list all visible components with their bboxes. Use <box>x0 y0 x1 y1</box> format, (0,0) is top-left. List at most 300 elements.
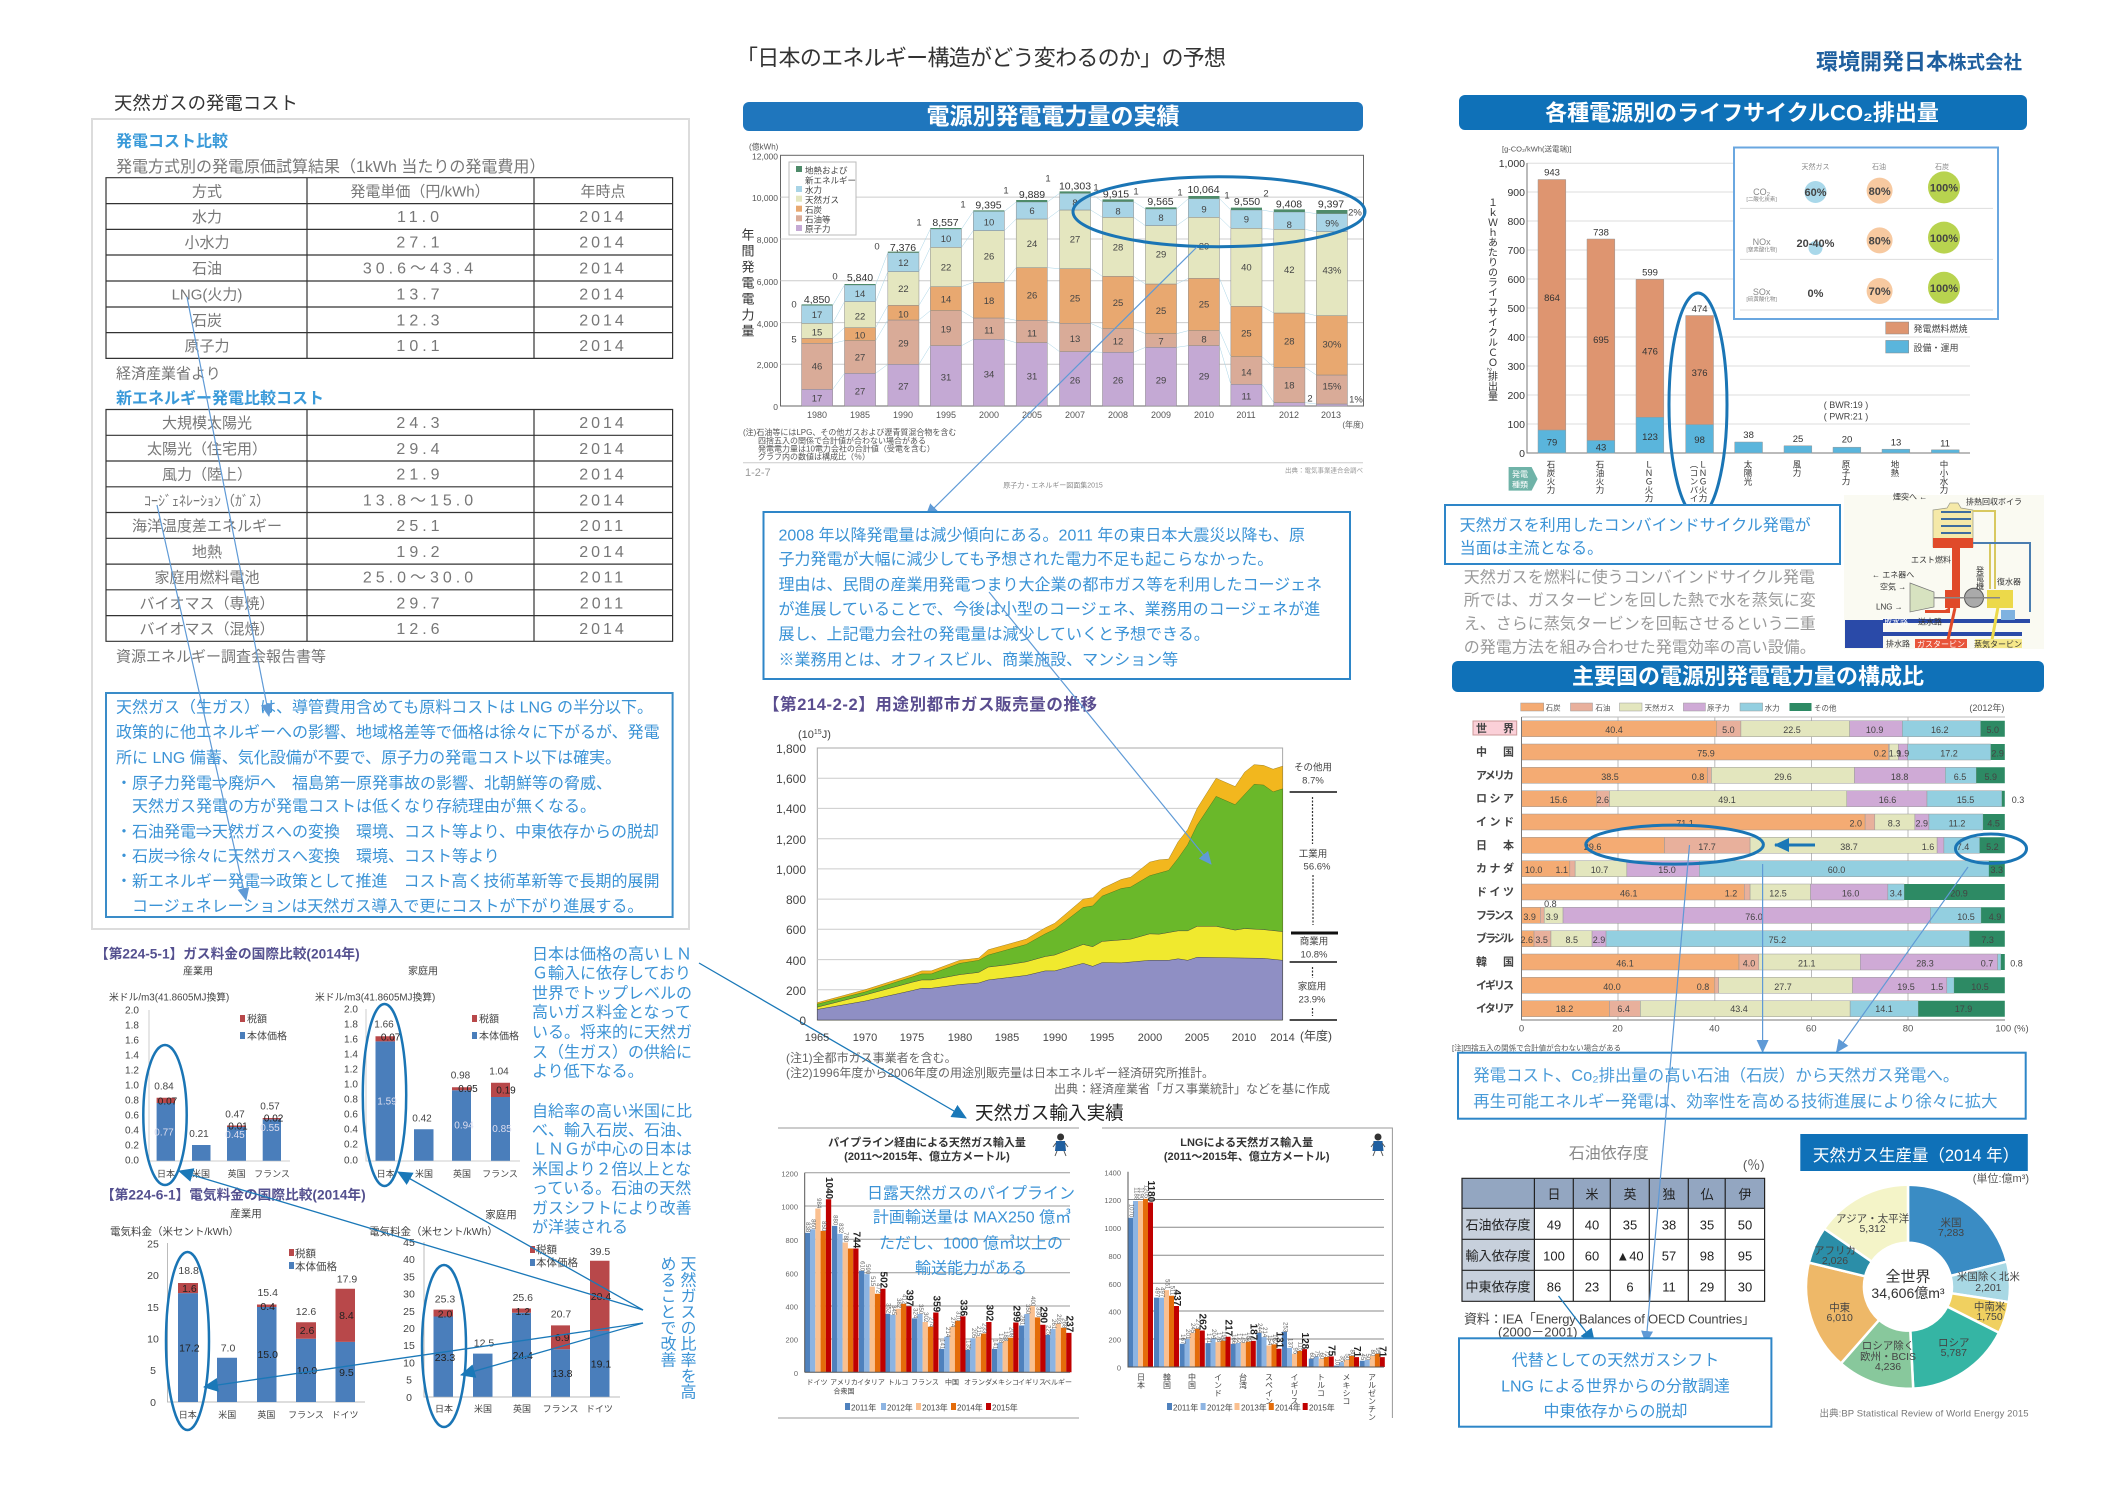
bar values: 1.9 <box>1889 748 1901 758</box>
bar chart: industrial gas price: 英国 <box>228 1168 246 1179</box>
diagram: combined cycle plant: 復水器 <box>1997 577 2021 587</box>
donut chart: gas production by region: 中東 <box>1829 1301 1851 1314</box>
table: new energy cost: 2014 <box>579 441 627 458</box>
inset: emissions comparison: 80% <box>1869 236 1891 248</box>
bar chart: industrial gas price: 米ドル/m3(41.8605MJ換算) <box>109 991 229 1004</box>
2011-2014 value labels: 350 <box>1024 1304 1030 1315</box>
arrow: callout to industrial area <box>989 592 1211 864</box>
2011-2014 value labels: 154 <box>1266 1335 1272 1346</box>
y axis labels <box>776 742 806 1028</box>
bar chart: household electricity price: 12.5 <box>474 1338 494 1350</box>
chart: generation by source 1980-2013: 原子力・エネルギー図面集2015 <box>1003 481 1103 490</box>
x axis labels: (年度) <box>1300 1029 1332 1043</box>
bar chart: household electricity price: 2.0 <box>438 1309 452 1321</box>
callout: Japan-Russia pipeline: 輸送能力がある <box>915 1259 1027 1277</box>
2015 value labels: 1180 <box>1145 1180 1156 1203</box>
x axis labels: 1995 <box>1090 1032 1114 1044</box>
table: oil dependency: 石油依存度 <box>1569 1144 1649 1162</box>
callout: natural gas cost summary: 天然ガス発電の方が発電コストは低くなり存続理由が無くなる。 <box>132 798 596 816</box>
bar values: 0.2 <box>1874 748 1886 758</box>
bar chart: household electricity price: 35 <box>403 1271 415 1283</box>
text block: Japan gas price explanation: 世界でトップレベルの <box>532 985 692 1003</box>
x axis labels: 2005 <box>1185 1032 1209 1044</box>
table: new energy cost: 12.6 <box>396 621 444 638</box>
bar segment values: 14 <box>855 289 865 300</box>
x axis labels: 2000 <box>979 410 999 420</box>
diagram: combined cycle plant: 煙突へ ← <box>1893 493 1927 502</box>
table: oil dependency: 60 <box>1585 1249 1599 1264</box>
title: 「日本のエネルギー構造がどう変わるのか」の予想 <box>736 46 1226 71</box>
bar chart: household electricity price: 25.3 <box>435 1294 455 1306</box>
stacked areas <box>817 765 1283 1020</box>
bar chart: household gas price: 税額 <box>479 1013 499 1026</box>
2011-2014 value labels: 35 <box>1338 1356 1344 1363</box>
source note: 資源エネルギー調査会報告書等 <box>116 648 326 666</box>
bar chart: lifecycle CO2 by source: 500 <box>1507 303 1525 315</box>
inset: emissions comparison: SOx <box>1753 287 1771 297</box>
bar totals: 9,889 <box>1019 189 1045 201</box>
table: oil dependency: 35 <box>1623 1218 1637 1233</box>
bar segment values: 25 <box>1113 298 1123 309</box>
bar chart: industrial gas price: 0.84 <box>154 1082 174 1093</box>
bar chart: industrial gas price: 0.4 <box>125 1126 139 1137</box>
bar chart: household electricity price: 25.6 <box>513 1292 533 1304</box>
table: new energy cost: 海洋温度差エネルギー <box>132 518 282 535</box>
vertical text: raise gas ratio: めることで改善 <box>658 1255 676 1367</box>
2011-2014 value labels: 345 <box>890 1305 896 1316</box>
table: generation cost by method: 30.6～43.4 <box>363 261 477 278</box>
bar chart: household electricity price: 45 <box>403 1237 415 1249</box>
2011-2014 value labels: 850 <box>820 1221 826 1232</box>
text block: Japan gas price explanation: 高いガス料金となって <box>532 1004 691 1022</box>
2011-2014 value labels: 50 <box>1344 1354 1350 1361</box>
2015 value labels: 502 <box>878 1272 888 1289</box>
callout: natural gas cost summary: ・石油発電⇒天然ガスへの変換 環境、コスト等より、中東依存からの脱却 <box>116 823 659 841</box>
bar segment values: 18 <box>1284 381 1295 392</box>
bar chart: industrial gas price: 本体価格 <box>247 1030 287 1043</box>
donut chart: gas production by region: ロシア <box>1938 1337 1970 1349</box>
table: new energy cost: バイオマス（専焼） <box>139 595 275 612</box>
heading box: gas production: 天然ガス生産量（2014 年） <box>1813 1146 2019 1165</box>
text block: Japan gas price explanation <box>532 946 692 1237</box>
bar chart: industrial gas price: 1.8 <box>125 1021 139 1032</box>
categories: イギリス <box>1290 1373 1299 1405</box>
table: new energy cost: 家庭用燃料電池 <box>154 569 260 587</box>
bar segment values: 42 <box>1284 265 1295 276</box>
bar segment values: 27 <box>1070 235 1080 246</box>
area chart: city gas sales by use: (10 <box>798 729 814 741</box>
table: generation cost by method: 27.1 <box>396 235 444 252</box>
table: generation cost by method: 10.1 <box>396 338 444 355</box>
bar chart: household gas price: 0.94 <box>454 1121 474 1132</box>
donut chart: gas production by region <box>1806 1185 2020 1389</box>
bar segment values: 26 <box>1027 291 1037 302</box>
company logo: 環境開発日本株式会社 <box>1816 50 2023 75</box>
x axis labels: 2014 <box>1270 1032 1295 1044</box>
bar chart: industrial electricity price: 12.6 <box>296 1306 316 1318</box>
bar chart: household electricity price: 30 <box>403 1289 415 1301</box>
legend: 地熱および <box>805 166 848 176</box>
bar values <box>1544 167 1950 454</box>
2011-2014 value labels: 261 <box>1050 1319 1056 1330</box>
arrow: to natural gas imports <box>699 963 966 1118</box>
table: oil dependency: 35 <box>1700 1218 1714 1233</box>
callout: move to natural gas: 再生可能エネルギー発電は、効率性を高める技術進展により徐々に拡大 <box>1473 1093 1997 1111</box>
bar values: 29.6 <box>1774 772 1792 782</box>
categories: 韓国 <box>1162 1372 1172 1390</box>
callout: decline in generation <box>764 512 1350 679</box>
bar segment values: 30% <box>1322 339 1342 350</box>
bar chart: industrial electricity price: 2.6 <box>300 1325 314 1337</box>
chart: generation mix by country <box>1452 702 2029 1052</box>
chart notes: (注1)全都市ガス事業者を含む。 <box>786 1051 957 1065</box>
donut chart: gas production by region: 中南米 <box>1974 1300 2006 1313</box>
diagram: combined cycle plant: 排熱回収ボイラ <box>1966 497 2022 507</box>
badge: generation type <box>1509 467 1538 491</box>
categories: 中小水力 <box>1939 460 1949 495</box>
bar chart: industrial gas price: 税額 <box>247 1013 267 1026</box>
bar chart: household gas price <box>315 965 520 1179</box>
bar chart: industrial electricity price: 9.5 <box>339 1367 354 1379</box>
chart: generation mix by country: (2012年) <box>1969 702 2004 713</box>
bar totals: 9,550 <box>1234 196 1260 208</box>
2011-2014 value labels: 171 <box>1205 1333 1211 1344</box>
bar chart: industrial gas price: 0.77 <box>154 1127 174 1138</box>
table: generation cost by method: 発電単価（円/kWh） <box>350 183 490 200</box>
text block: Japan gas price explanation: ス（生ガス）の供給に <box>532 1044 692 1062</box>
callout: combined cycle: 当面は主流となる。 <box>1460 540 1603 558</box>
bar segment values: 8 <box>1072 198 1078 209</box>
table: oil dependency: 11 <box>1662 1280 1676 1295</box>
bar chart: industrial gas price: 0.47 <box>225 1110 245 1121</box>
2011-2014 value labels: 75 <box>1313 1351 1319 1358</box>
x axis labels: (年度) <box>1342 420 1364 430</box>
2011-2014 value labels <box>804 1198 1066 1351</box>
bar chart: industrial gas price: 0.07 <box>158 1096 178 1107</box>
y axis labels: 1,600 <box>776 772 806 786</box>
bar segment values: 8 <box>1201 335 1207 346</box>
bar segment values: 14 <box>1241 367 1252 378</box>
bar chart: industrial electricity price: 8.4 <box>339 1310 354 1322</box>
table: oil dependency: 輸入依存度 <box>1465 1249 1531 1264</box>
bar chart: household electricity price: フランス <box>543 1404 579 1414</box>
2011-2014 value labels: 780 <box>842 1232 848 1243</box>
inset: emissions comparison: [窒素酸化物] <box>1746 246 1777 254</box>
bar values: 2.9 <box>1991 748 2004 758</box>
2015 value labels: 131 <box>1274 1332 1284 1349</box>
callout: Japan-Russia pipeline: ただし、1000 億㎥以上の <box>879 1234 1063 1252</box>
2011-2014 value labels: 72 <box>1323 1351 1329 1358</box>
categories: ドイツ <box>806 1379 828 1386</box>
bar segment values: 26 <box>1070 376 1080 387</box>
table: new energy cost: 19.2 <box>396 544 444 561</box>
table: generation cost by method <box>106 178 673 358</box>
2011-2014 value labels: 141 <box>992 1339 998 1350</box>
bar chart: industrial gas price: 0.02 <box>264 1114 284 1125</box>
bar segment values: 15 <box>812 327 822 338</box>
donut chart: gas production by region: 全世界 <box>1885 1268 1931 1285</box>
bar chart: household gas price: フランス <box>482 1169 518 1179</box>
bar chart: pipeline imports <box>778 1128 1079 1418</box>
text: (単位:億m³) <box>1973 1171 2029 1185</box>
chart notes <box>743 427 956 462</box>
country labels: 中国 <box>1476 745 1514 759</box>
highlight oval: Japan gas industrial <box>143 1045 187 1185</box>
bar values: 2.0 <box>1850 818 1862 828</box>
2011-2014 value labels: 984 <box>815 1198 821 1209</box>
bar chart: industrial gas price: 0.01 <box>228 1122 248 1133</box>
table: generation cost by method: 2014 <box>579 313 627 330</box>
table: oil dependency: ▲40 <box>1616 1249 1644 1264</box>
donut chart: gas production by region: 2,201 <box>1975 1282 2002 1294</box>
x axis labels: 2012 <box>1279 410 1299 420</box>
donut chart: gas production by region: 4,236 <box>1875 1361 1901 1373</box>
x axis labels: 2011 <box>1236 410 1256 420</box>
2011-2014 value labels: 253 <box>1282 1322 1288 1333</box>
table: new energy cost <box>106 410 673 641</box>
bar segment values: 19 <box>941 325 951 336</box>
2011-2014 value labels: 188 <box>1002 1331 1008 1342</box>
table: generation cost by method: 年時点 <box>580 183 626 200</box>
callout: combined cycle: 天然ガスを利用したコンバインドサイクル発電が <box>1460 517 1811 535</box>
source note: 経済産業省より <box>116 366 221 383</box>
table: oil dependency: 石油依存度 <box>1465 1218 1531 1233</box>
legend: 2011年 <box>851 1402 876 1412</box>
legend <box>1521 703 1837 713</box>
legend: 新エネルギー <box>805 176 856 186</box>
table: new energy cost: 風力（陸上） <box>162 467 252 484</box>
callout: decline in generation: 2008 年以降発電量は減少傾向にある。2011 年の東日本大震災以降も、原 <box>778 527 1305 545</box>
bar chart: industrial electricity price: フランス <box>288 1410 324 1420</box>
table: generation cost by method: 石炭 <box>192 313 222 330</box>
bar values: 43.4 <box>1730 1004 1748 1014</box>
bar chart: industrial electricity price: 1.6 <box>182 1283 197 1295</box>
callout: shift to natural gas: 代替としての天然ガスシフト <box>1512 1352 1719 1370</box>
bar chart: household electricity price: 税額 <box>536 1243 557 1256</box>
table: new energy cost: 地熱 <box>192 544 222 561</box>
bar values: 376 <box>1692 368 1708 379</box>
diagram: combined cycle plant: 空気 → <box>1880 582 1906 592</box>
bar chart: household electricity price: 24.4 <box>513 1350 533 1362</box>
bar chart: household gas price: 2.0 <box>344 1005 358 1016</box>
heading: city gas sales: 【第214-2-2】用途別都市ガス販売量の推移 <box>763 694 1097 714</box>
bar segment values: 22 <box>898 284 909 295</box>
bar chart: pipeline imports: 0 <box>794 1369 798 1378</box>
bar chart: industrial gas price: 0.2 <box>125 1141 139 1152</box>
bar chart: lifecycle CO2 by source: 900 <box>1507 187 1525 199</box>
categories: トルコ <box>888 1378 908 1386</box>
2011-2014 value labels: 137 <box>1286 1338 1292 1349</box>
bar chart: household electricity price: 15 <box>403 1340 415 1352</box>
bar totals: 4,850 <box>804 294 830 306</box>
table: oil dependency: 中東依存度 <box>1465 1280 1531 1295</box>
bar chart: industrial gas price: 1.0 <box>125 1081 139 1092</box>
table: new energy cost: 2014 <box>579 544 627 561</box>
callout: natural gas cost summary: 政策的に他エネルギーへの影響、地域格差等で価格は徐々に下がるが、発電 <box>116 724 660 742</box>
bar chart: household electricity price: 10 <box>403 1357 415 1369</box>
table: new energy cost: 29.7 <box>396 595 444 612</box>
bar segment values: 0 <box>832 272 838 283</box>
callout: shift to natural gas: 中東依存からの脱却 <box>1543 1402 1688 1420</box>
y axis labels: 600 <box>786 923 806 937</box>
bar values: 5.9 <box>1985 772 1997 782</box>
bar chart: household electricity price: 20.4 <box>591 1291 611 1303</box>
bar chart: industrial gas price: 1.6 <box>125 1036 139 1047</box>
bar segment values: 34 <box>984 370 994 381</box>
bar chart: household electricity price: 日本 <box>435 1403 453 1414</box>
categories: アメリカ <box>830 1378 858 1386</box>
section bar: lifecycle CO2: 各種電源別のライフサイクルCO₂排出量 <box>1545 101 1939 126</box>
legend: 原子力 <box>805 224 831 234</box>
bar segment values: 10 <box>898 310 909 321</box>
share annotations: 工業用 <box>1299 848 1327 860</box>
x axis labels: 1980 <box>948 1032 972 1044</box>
text block: Japan gas price explanation: Ｇ輸入に依存しており <box>532 965 691 983</box>
2011-2014 value labels: 178 <box>997 1333 1003 1344</box>
bar values: 1.5 <box>1931 982 1943 992</box>
callout: decline in generation: ※業務用とは、オフィスビル、商業施設、マンション等 <box>778 651 1178 669</box>
x axis labels: 2007 <box>1065 410 1085 420</box>
chart: generation by source 1980-2013: 6,000 <box>757 277 778 287</box>
bar chart: industrial electricity price: ドイツ <box>331 1410 359 1420</box>
bar segment values: 9 <box>1201 205 1207 216</box>
bar segment values: 1 <box>1224 191 1230 202</box>
x axis labels: 1985 <box>850 410 870 420</box>
bar chart: industrial gas price: 0.45 <box>225 1130 245 1141</box>
bar values: 15.0 <box>1658 865 1676 875</box>
text block: Japan gas price explanation: ＬＮＧが中心の日本は <box>532 1141 692 1159</box>
bar totals: 10,064 <box>1187 184 1220 196</box>
bar values: 5.2 <box>1986 842 1999 852</box>
inset: emissions comparison: 60% <box>1804 187 1827 199</box>
bar values: 4.9 <box>1989 912 2001 922</box>
bar values: 11 <box>1940 438 1950 449</box>
bar values: 17.2 <box>1940 748 1958 758</box>
table: new energy cost: 2011 <box>580 595 626 612</box>
panel frame <box>92 119 689 929</box>
2011-2014 value labels: 135 <box>964 1340 970 1351</box>
table: oil dependency: 86 <box>1547 1280 1561 1295</box>
x axis <box>1519 1024 2029 1035</box>
bar segment values: 11 <box>1241 392 1251 403</box>
2011-2014 value labels: 412 <box>900 1294 906 1305</box>
table: oil dependency: 資料：IEA「Energy Balances of OECD Countries」 <box>1464 1311 1755 1326</box>
bar chart: LNG imports: 200 <box>1108 1336 1121 1345</box>
table: generation cost by method: 石油 <box>192 261 222 278</box>
bar values: 49.1 <box>1718 795 1736 805</box>
bar values: 46.1 <box>1620 888 1638 898</box>
chart notes <box>786 1051 1330 1096</box>
bar chart: household gas price: 1.6 <box>344 1035 358 1046</box>
2011-2014 value labels: 310 <box>954 1311 960 1322</box>
bar chart: lifecycle CO2 by source <box>1486 144 1970 528</box>
table: new energy cost: 13.8～15.0 <box>363 492 477 509</box>
2011-2014 value labels <box>1128 1185 1380 1366</box>
2011-2014 value labels: 551 <box>1164 1279 1170 1290</box>
bar chart: household gas price: 英国 <box>453 1168 471 1179</box>
table: new energy cost: 2014 <box>579 467 627 484</box>
x axis labels: 2010 <box>1232 1032 1256 1044</box>
bar segment values: 43% <box>1322 265 1342 276</box>
bar chart: pipeline imports: 1000 <box>781 1203 798 1212</box>
bar values: 75.9 <box>1697 748 1715 758</box>
text block: Japan gas price explanation: べ、輸入石炭、石油、 <box>532 1122 692 1140</box>
bar chart: household gas price: 1.04 <box>489 1067 509 1078</box>
country labels: 世界 <box>1476 721 1514 735</box>
bar chart: industrial gas price: 産業用 <box>183 965 213 978</box>
donut chart: gas production by region: アフリカ <box>1814 1245 1856 1257</box>
2011-2014 value labels: 293 <box>1055 1314 1061 1325</box>
arrow: LNG to summary <box>187 297 269 716</box>
bar values: 0.8 <box>2010 958 2023 968</box>
categories: 台湾 <box>1238 1372 1248 1390</box>
bar chart: household gas price: 0.05 <box>458 1084 478 1095</box>
bar chart: industrial electricity price: 米国 <box>218 1409 236 1420</box>
nuclear note <box>1824 400 1868 422</box>
bar chart: household gas price: 1.4 <box>344 1050 358 1061</box>
x axis: 0 <box>1519 1024 1524 1035</box>
2011-2014 value labels: 610 <box>858 1261 864 1272</box>
2011-2014 value labels: 352 <box>884 1303 890 1314</box>
text block: combined cycle description <box>1464 569 1816 656</box>
categories: 原子力 <box>1841 460 1851 487</box>
bar segment values: 9 <box>1244 215 1249 226</box>
bar values: 29.6 <box>1584 842 1601 852</box>
text block: Japan gas price explanation: 米国より２倍以上とな <box>532 1161 691 1179</box>
2015 value labels: 302 <box>984 1305 994 1322</box>
categories: フランス <box>911 1378 939 1386</box>
x axis labels <box>807 410 1364 430</box>
arrow: oval to callout <box>926 247 1197 516</box>
chart notes: (注)石油等にはLPG、その他ガスおよび瀝青質混合物を含む <box>743 427 956 437</box>
bar values <box>1520 725 2024 1014</box>
chart: generation by source 1980-2013: 1-2-7 <box>745 467 771 479</box>
callout: move to natural gas: 発電コスト、Co₂排出量の高い石油（石炭）から天然ガス発電へ。 <box>1473 1067 1959 1085</box>
bar chart: LNG imports: 400 <box>1108 1308 1121 1317</box>
2015 value labels: 71 <box>1351 1346 1362 1358</box>
table: oil dependency <box>1462 1144 1765 1339</box>
bar chart: household gas price: 1.66 <box>374 1019 394 1030</box>
legend: その他 <box>1814 703 1837 713</box>
bar values: 864 <box>1544 293 1560 304</box>
chart: generation by source 1980-2013: 10,000 <box>752 193 778 203</box>
legend: 2011年 <box>1173 1402 1198 1412</box>
bar values: 20 <box>1842 434 1852 445</box>
bar values: 3.3 <box>1991 865 2003 875</box>
legend: 石油 <box>1595 703 1610 713</box>
callout: decline in generation: 子力発電が大幅に減少しても予想された電力不足も起こらなかった。 <box>778 551 1273 569</box>
bar chart: lifecycle CO2 by source: 100 <box>1507 419 1525 431</box>
area chart: city gas sales by use <box>776 729 1338 1044</box>
bar values: 20.9 <box>1950 888 1968 898</box>
text block: Japan gas price explanation: 自給率の高い米国に比 <box>532 1102 692 1120</box>
bar totals: 9,408 <box>1276 199 1302 211</box>
donut chart: gas production by region: ロシア除く <box>1862 1339 1914 1352</box>
table: new energy cost: 2011 <box>580 518 626 535</box>
inset: emissions comparison: 0% <box>1808 288 1824 300</box>
bar chart: lifecycle CO2 by source: 600 <box>1507 274 1525 286</box>
2011-2014 value labels: 172 <box>1235 1333 1241 1344</box>
legend: 2015年 <box>1309 1402 1335 1412</box>
bar chart: household gas price: 家庭用 <box>408 965 438 978</box>
2011-2014 value labels: 204 <box>1210 1329 1216 1340</box>
area chart: city gas sales by use: 15 <box>814 729 822 736</box>
2011-2014 value labels: 95 <box>1292 1348 1298 1355</box>
chart notes: 四捨五入の関係で合計値が合わない場合がある <box>758 435 926 445</box>
table: generation cost by method: 方式 <box>192 183 222 200</box>
country labels: ロシア <box>1476 792 1514 805</box>
arrow: renewables to callout <box>1836 867 1968 1052</box>
